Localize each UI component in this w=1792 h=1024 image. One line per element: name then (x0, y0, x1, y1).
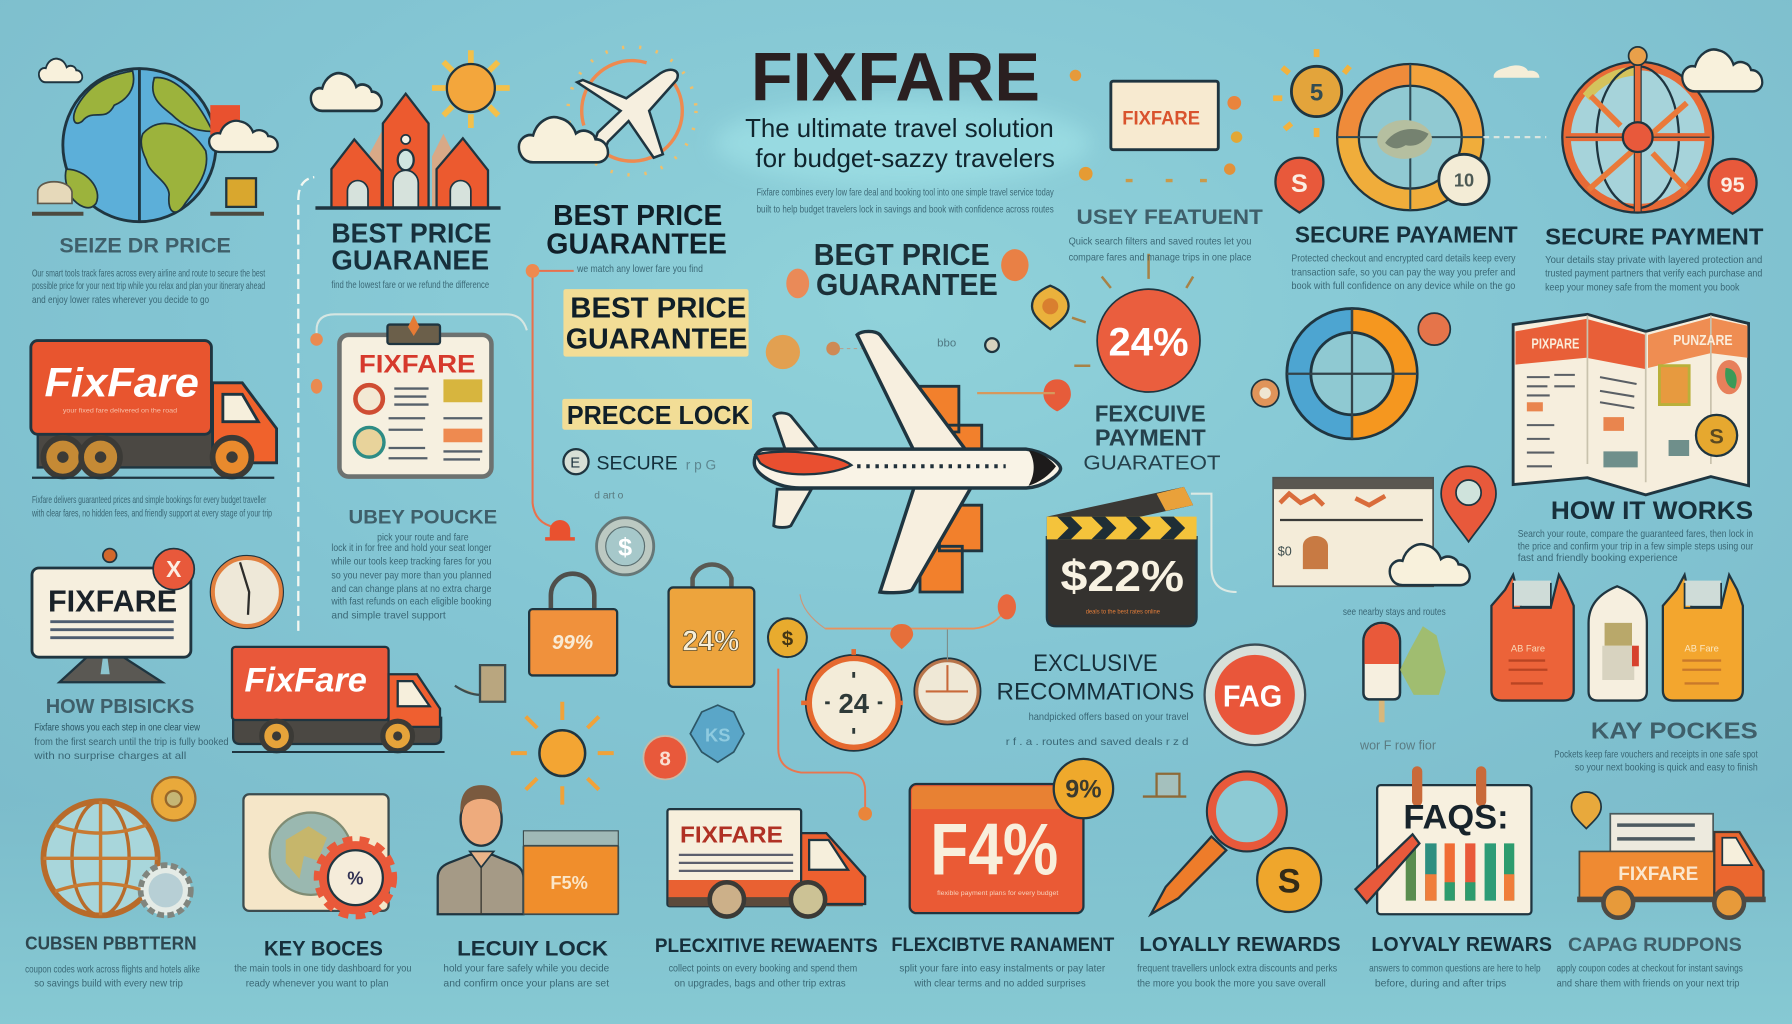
secure row: SECURE (597, 453, 678, 475)
text block: book with full confidence on any device while on the go (1291, 281, 1515, 292)
heading: BEST PRICE (331, 217, 491, 248)
text block (331, 533, 492, 621)
text block: with no surprise charges at all (33, 751, 186, 762)
text block: Your details stay private with layered protection and (1545, 255, 1762, 266)
heading: HOW PBISICKS (46, 695, 194, 718)
heading: FEXCUIVE (1095, 401, 1206, 427)
icon: sun (432, 50, 510, 128)
icon: card: $0 (1278, 544, 1292, 558)
text block (1557, 963, 1743, 989)
icon: gold coin (768, 618, 807, 657)
icon: red marker (1043, 379, 1071, 411)
panel: key pockets tags (1491, 575, 1758, 773)
text block (1291, 254, 1516, 292)
icon: truck (667, 809, 865, 917)
icon: sun (511, 702, 614, 805)
small markers around plane: bbo (937, 337, 956, 349)
text block (234, 963, 411, 989)
panel: secure payment wheel (1545, 47, 1763, 293)
text block: fast and friendly booking experience (1518, 553, 1678, 564)
panel: loyalty rewards magnifier (1137, 771, 1341, 989)
icon: truck (232, 647, 445, 752)
icon: calendar (1377, 771, 1531, 914)
icon: bag 24 (669, 564, 754, 687)
text block (25, 965, 200, 989)
text block: with fast refunds on each eligible booking (331, 597, 491, 608)
panel: clapperboard: deals to the best rates online (1086, 609, 1160, 616)
icon: clipboard: FIXFARE (359, 351, 475, 379)
icon: dollar coin: S (1278, 863, 1301, 901)
icon: sun coin (1273, 49, 1350, 137)
text block: Our smart tools track fares across every airline and route to secure the best (32, 269, 265, 280)
heading: SEIZE DR PRICE (59, 233, 231, 258)
text block: before, during and after trips (1375, 978, 1506, 989)
subtitle: The ultimate travel solution (745, 113, 1054, 143)
icon: red close badge (153, 549, 194, 590)
secure row: d art o (594, 490, 624, 501)
subtitle: for budget-sazzy travelers (755, 143, 1055, 173)
text block: keep your money safe from the moment you book (1545, 282, 1740, 293)
icon: number coin (1439, 154, 1489, 205)
text block: answers to common questions are here to help (1369, 963, 1541, 974)
text block: lock it in for free and hold your seat longer (331, 543, 492, 554)
text block: Fixfare delivers guaranteed prices and simple bookings for every budget traveller (32, 495, 267, 506)
icon: tiny cloud (1494, 65, 1539, 78)
panel: 24 percent payment (977, 254, 1221, 475)
icon: number coin: 10 (1454, 169, 1474, 190)
heading: KAY POCKES (1591, 717, 1758, 743)
icon: wheel globe (1562, 47, 1713, 213)
icon: clock 24 (801, 649, 903, 751)
text block (1069, 237, 1251, 264)
heading (546, 200, 727, 261)
icon: gift (210, 105, 240, 137)
icon: truck: your fixed fare delivered on the road (63, 408, 177, 415)
icon: cloud (1682, 50, 1762, 91)
icon: connector markers (858, 594, 1016, 821)
icon: bag 24: 24% (682, 625, 739, 657)
icon: calendar: FAQS: (1403, 799, 1509, 837)
icon: cloud (209, 121, 278, 152)
text block: coupon codes work across flights and hotels alike (25, 965, 200, 976)
panel: shopping bags (529, 518, 807, 687)
icon: faq badge (1205, 645, 1305, 745)
icon: kiosk (1143, 774, 1186, 797)
text block: from the first search until the trip is fully booked (34, 737, 229, 748)
icon: sign (1070, 70, 1242, 181)
icon: percent circle: 24% (1109, 320, 1189, 364)
secure row: E (570, 455, 580, 471)
panel: best price guarantee houses (311, 50, 510, 291)
icon: cream tag (1589, 586, 1647, 701)
heading: SECURE PAYMENT (1545, 224, 1763, 250)
text block: trusted payment partners that verify each purchase and (1545, 269, 1762, 280)
icon: sign: FIXFARE (1122, 108, 1200, 130)
icon: clock (914, 629, 981, 725)
icon: blue badge: KS (705, 725, 730, 746)
panel: key pouches text (331, 506, 497, 621)
icon: bag: 99% (552, 631, 593, 654)
icon: brochure: PUNZARE (1673, 333, 1733, 349)
heading: EXCLUSIVE (1033, 650, 1158, 677)
icon: small plane (577, 70, 678, 158)
text block (33, 722, 229, 762)
icon: gold coin: $ (782, 628, 794, 651)
text block: Quick search filters and saved routes let you (1069, 237, 1251, 248)
heading: RECOMMATIONS (997, 678, 1194, 705)
icon: pencil (1355, 834, 1419, 903)
title (745, 39, 1055, 216)
icon: ticket: flexible payment plans for every budget (937, 890, 1058, 897)
text block (899, 963, 1106, 989)
text block: Search your route, compare the guaranteed fares, then lock in (1518, 529, 1753, 540)
panel: map card and pin (1191, 466, 1496, 618)
heading: GUARATEOT (1083, 452, 1221, 475)
icon: cloud (311, 73, 382, 111)
heading: PLECXITIVE REWAENTS (655, 935, 878, 957)
text block: Fixfare shows you each step in one clear view (34, 722, 201, 733)
text block: so savings build with every new trip (34, 978, 183, 989)
icon: leaf (1400, 626, 1446, 695)
text block: the more you book the more you save overall (1137, 978, 1326, 989)
connector lines (778, 594, 1006, 814)
text block: compare fares and manage trips in one place (1069, 253, 1251, 264)
heading: CAPAG RUDPONS (1568, 934, 1742, 956)
heading: LOYALLY REWARDS (1139, 933, 1341, 956)
text block: handpicked offers based on your travel (1029, 712, 1189, 723)
icon: red gear: % (347, 868, 364, 889)
label: best price guarantee (563, 289, 749, 357)
heading: GUARANEE (331, 245, 489, 276)
icon: picture card (243, 794, 389, 911)
icon: brochure: PIXPARE (1531, 337, 1579, 353)
text block (32, 269, 265, 306)
text block: Protected checkout and encrypted card details keep every (1291, 254, 1516, 265)
panel: globe secure price (32, 59, 278, 306)
icon: truck: FIXFARE (680, 821, 783, 847)
icon: clipboard (339, 315, 491, 477)
icon: blue orange donut (1251, 309, 1450, 439)
icon: faq badge: FAG (1223, 678, 1282, 713)
panel: usey feature sign (1069, 70, 1264, 264)
text block: and simple travel support (331, 610, 446, 621)
panel: fixfare truck (31, 341, 277, 520)
icon: red badge: 8 (659, 748, 671, 771)
panel: monitor how pbisicks (32, 549, 283, 762)
text block: and enjoy lower rates wherever you decide to go (32, 295, 209, 306)
icon: red badge (643, 736, 687, 779)
icon: dollar coin (597, 518, 654, 575)
text block: frequent travellers unlock extra discounts and perks (1137, 963, 1337, 974)
text block: collect points on every booking and spend them (669, 963, 857, 974)
panel: fixfare clipboard (310, 314, 527, 477)
text line: see nearby stays and routes (1343, 607, 1446, 618)
icon: truck (31, 341, 277, 478)
icon: brochure: S (1709, 423, 1724, 448)
panel: how it works brochure (1513, 314, 1754, 564)
title: FIXFARE (751, 39, 1040, 116)
icon: gold coin (1054, 759, 1113, 818)
label: price lock: PRECCE LOCK (567, 400, 750, 430)
text block: apply coupon codes at checkout for instant savings (1557, 963, 1743, 974)
icon: pin (1571, 792, 1601, 829)
title: built to help budget travelers lock in savings and book with confidence across routes (757, 205, 1054, 216)
icon: truck: FixFare (45, 360, 199, 406)
icon: small cloud (39, 59, 82, 82)
text block (1554, 750, 1758, 773)
panel: plecitive rewards truck (655, 809, 878, 989)
panel: second truck (232, 647, 505, 752)
icon: gold pin (1032, 286, 1069, 329)
text block: so you never pay more than you planned (331, 570, 491, 581)
icon: price box: F5% (550, 872, 588, 893)
text block: pick your route and fare (377, 533, 469, 544)
heading: HOW IT WORKS (1551, 497, 1753, 525)
icon: red gear (319, 841, 392, 914)
heading: PAYMENT (1095, 425, 1206, 451)
icon: truck: FixFare (245, 661, 367, 699)
text block (443, 963, 609, 989)
text block: the main tools in one tidy dashboard for you (234, 963, 411, 974)
panel: sun and badges (511, 702, 744, 805)
secure row: r p G (686, 458, 716, 473)
icon: wall clock (210, 555, 283, 629)
icon: dollar coin: $ (618, 533, 632, 561)
panel: clocks (801, 629, 981, 751)
heading: USEY FEATUENT (1077, 204, 1264, 229)
text block: on upgrades, bags and other trip extras (674, 978, 846, 989)
text block: and can change plans at no extra charge (331, 584, 491, 595)
heading (331, 217, 491, 276)
label: best price guarantee: GUARANTEE (566, 324, 747, 356)
heading: LECUIY LOCK (457, 935, 608, 960)
icon: red close badge: X (166, 556, 182, 582)
text block: and share them with friends on your next trip (1557, 978, 1739, 989)
heading: UBEY POUCKE (349, 506, 497, 528)
center heading: best price guarantee: BEGT PRICE (814, 237, 990, 272)
panel: plane emblem (519, 47, 727, 275)
icon: orbit (568, 47, 696, 175)
icon: red pin: S (1291, 170, 1308, 198)
heading: BEST PRICE (553, 200, 722, 232)
icon: target coin (152, 777, 195, 821)
icon: ticket (910, 784, 1083, 913)
icon: blue badge (690, 705, 744, 762)
icon: gold coin: 9% (1065, 776, 1102, 804)
text: caption: wor F row fior (1359, 739, 1436, 753)
icon: red pin (1709, 159, 1757, 214)
heading: FLEXCIBTVE RANAMENT (891, 934, 1114, 956)
heading: GUARANTEE (546, 229, 727, 261)
icon: forklift (455, 665, 505, 702)
icon: magnifier (1151, 771, 1287, 914)
text block (1137, 963, 1337, 989)
icon: houses (315, 94, 501, 208)
small markers around plane (766, 335, 999, 369)
icon: red pin (1275, 158, 1323, 213)
text block: possible price for your next trip while you relax and plan your itinerary ahead (32, 281, 265, 292)
heading (1083, 401, 1221, 475)
heading: LOYVALY REWARS (1371, 933, 1552, 956)
icon: popsicle (1363, 623, 1400, 722)
panel: exclusive recommendations (997, 650, 1194, 748)
icon: dollar coin (1257, 848, 1321, 912)
text block: while our tools keep tracking fares for you (331, 557, 491, 568)
text line: we match any lower fare you find (576, 264, 703, 275)
icon: large airplane (754, 331, 1061, 593)
icon: map pin (1441, 466, 1496, 542)
text block: so your next booking is quick and easy to finish (1575, 762, 1758, 773)
heading (997, 650, 1194, 705)
icon: red pin: 95 (1721, 172, 1745, 197)
text line: find the lowest fare or we refund the difference (331, 280, 489, 291)
panel: key boces (234, 794, 411, 989)
text block (1369, 963, 1541, 989)
icon: red tag: AB Fare (1511, 643, 1545, 653)
icon: ticket: F4% (930, 809, 1058, 890)
text block (31, 495, 272, 520)
text: percent: $22% (1061, 553, 1184, 601)
text block: with clear terms and no added surprises (913, 978, 1086, 989)
icon: sun coin: 5 (1310, 80, 1323, 107)
icon: yellow tag (1663, 575, 1743, 701)
heading: CUBSEN PBBTTERN (25, 933, 197, 954)
icon: globe (63, 69, 216, 222)
text block (1518, 529, 1754, 564)
text block (1545, 255, 1762, 293)
text block: the price and confirm your trip in a few simple steps using our (1518, 542, 1754, 553)
subtitle (745, 113, 1055, 173)
icon: percent circle (1072, 254, 1200, 392)
text block: split your fare into easy instalments or pay later (899, 963, 1106, 974)
center heading: best price guarantee (786, 237, 1029, 302)
heading: SECURE PAYAMENT (1295, 221, 1518, 247)
icon: bag (529, 574, 617, 675)
text block: hold your fare safely while you decide (443, 963, 609, 974)
text block: with clear fares, no hidden fees, and friendly support at every stage of your trip (31, 509, 272, 520)
icon: monitor (32, 549, 191, 682)
panel: clapperboard (1047, 487, 1197, 626)
icon: brochure (1513, 314, 1749, 495)
panel: f4 percent ticket (891, 759, 1186, 989)
title: Fixfare combines every low fare deal and booking tool into one simple travel service today (757, 187, 1054, 198)
label: best price guarantee: BEST PRICE (570, 293, 746, 325)
icon: person (438, 785, 523, 914)
icon: yellow tag: AB Fare (1685, 643, 1719, 653)
icon: card (1273, 478, 1433, 586)
text block (1006, 712, 1189, 748)
text block: and confirm once your plans are set (443, 978, 609, 989)
panel: capag rupons truck (1557, 792, 1766, 989)
icon: clock 24: 24 (838, 688, 870, 719)
secure row (563, 449, 716, 501)
text block: transaction safe, so you can pay the way you prefer and (1291, 267, 1515, 278)
panel: faqs calendar (1355, 771, 1552, 989)
icon: truck: FIXFARE (1618, 863, 1698, 885)
icon: cloud (1390, 544, 1470, 585)
heading: KEY BOCES (264, 935, 383, 960)
icon: wire globe (43, 801, 158, 915)
text block (669, 963, 857, 989)
panel: cubsen pattern (25, 777, 200, 989)
icon: cloud (519, 117, 608, 162)
icon: monitor: FIXFARE (48, 583, 177, 618)
panel: orange timeline (526, 264, 575, 541)
text block: ready whenever you want to plan (246, 978, 389, 989)
icon: gear (141, 865, 191, 915)
panel: secure payment donut (1273, 49, 1546, 292)
text block: r f . a . routes and saved deals r z d (1006, 737, 1189, 748)
panel: leculy lock (438, 785, 618, 989)
panel: faq circle (1205, 623, 1446, 753)
icon: card stand (226, 178, 256, 207)
icon: red tag (1491, 575, 1574, 701)
icon: donut ring (1337, 64, 1483, 210)
icon: truck (1577, 814, 1766, 918)
icon: books (38, 182, 72, 203)
center heading: best price guarantee: GUARANTEE (816, 267, 998, 302)
icon: price box (523, 831, 618, 914)
dashed connector (298, 177, 314, 631)
